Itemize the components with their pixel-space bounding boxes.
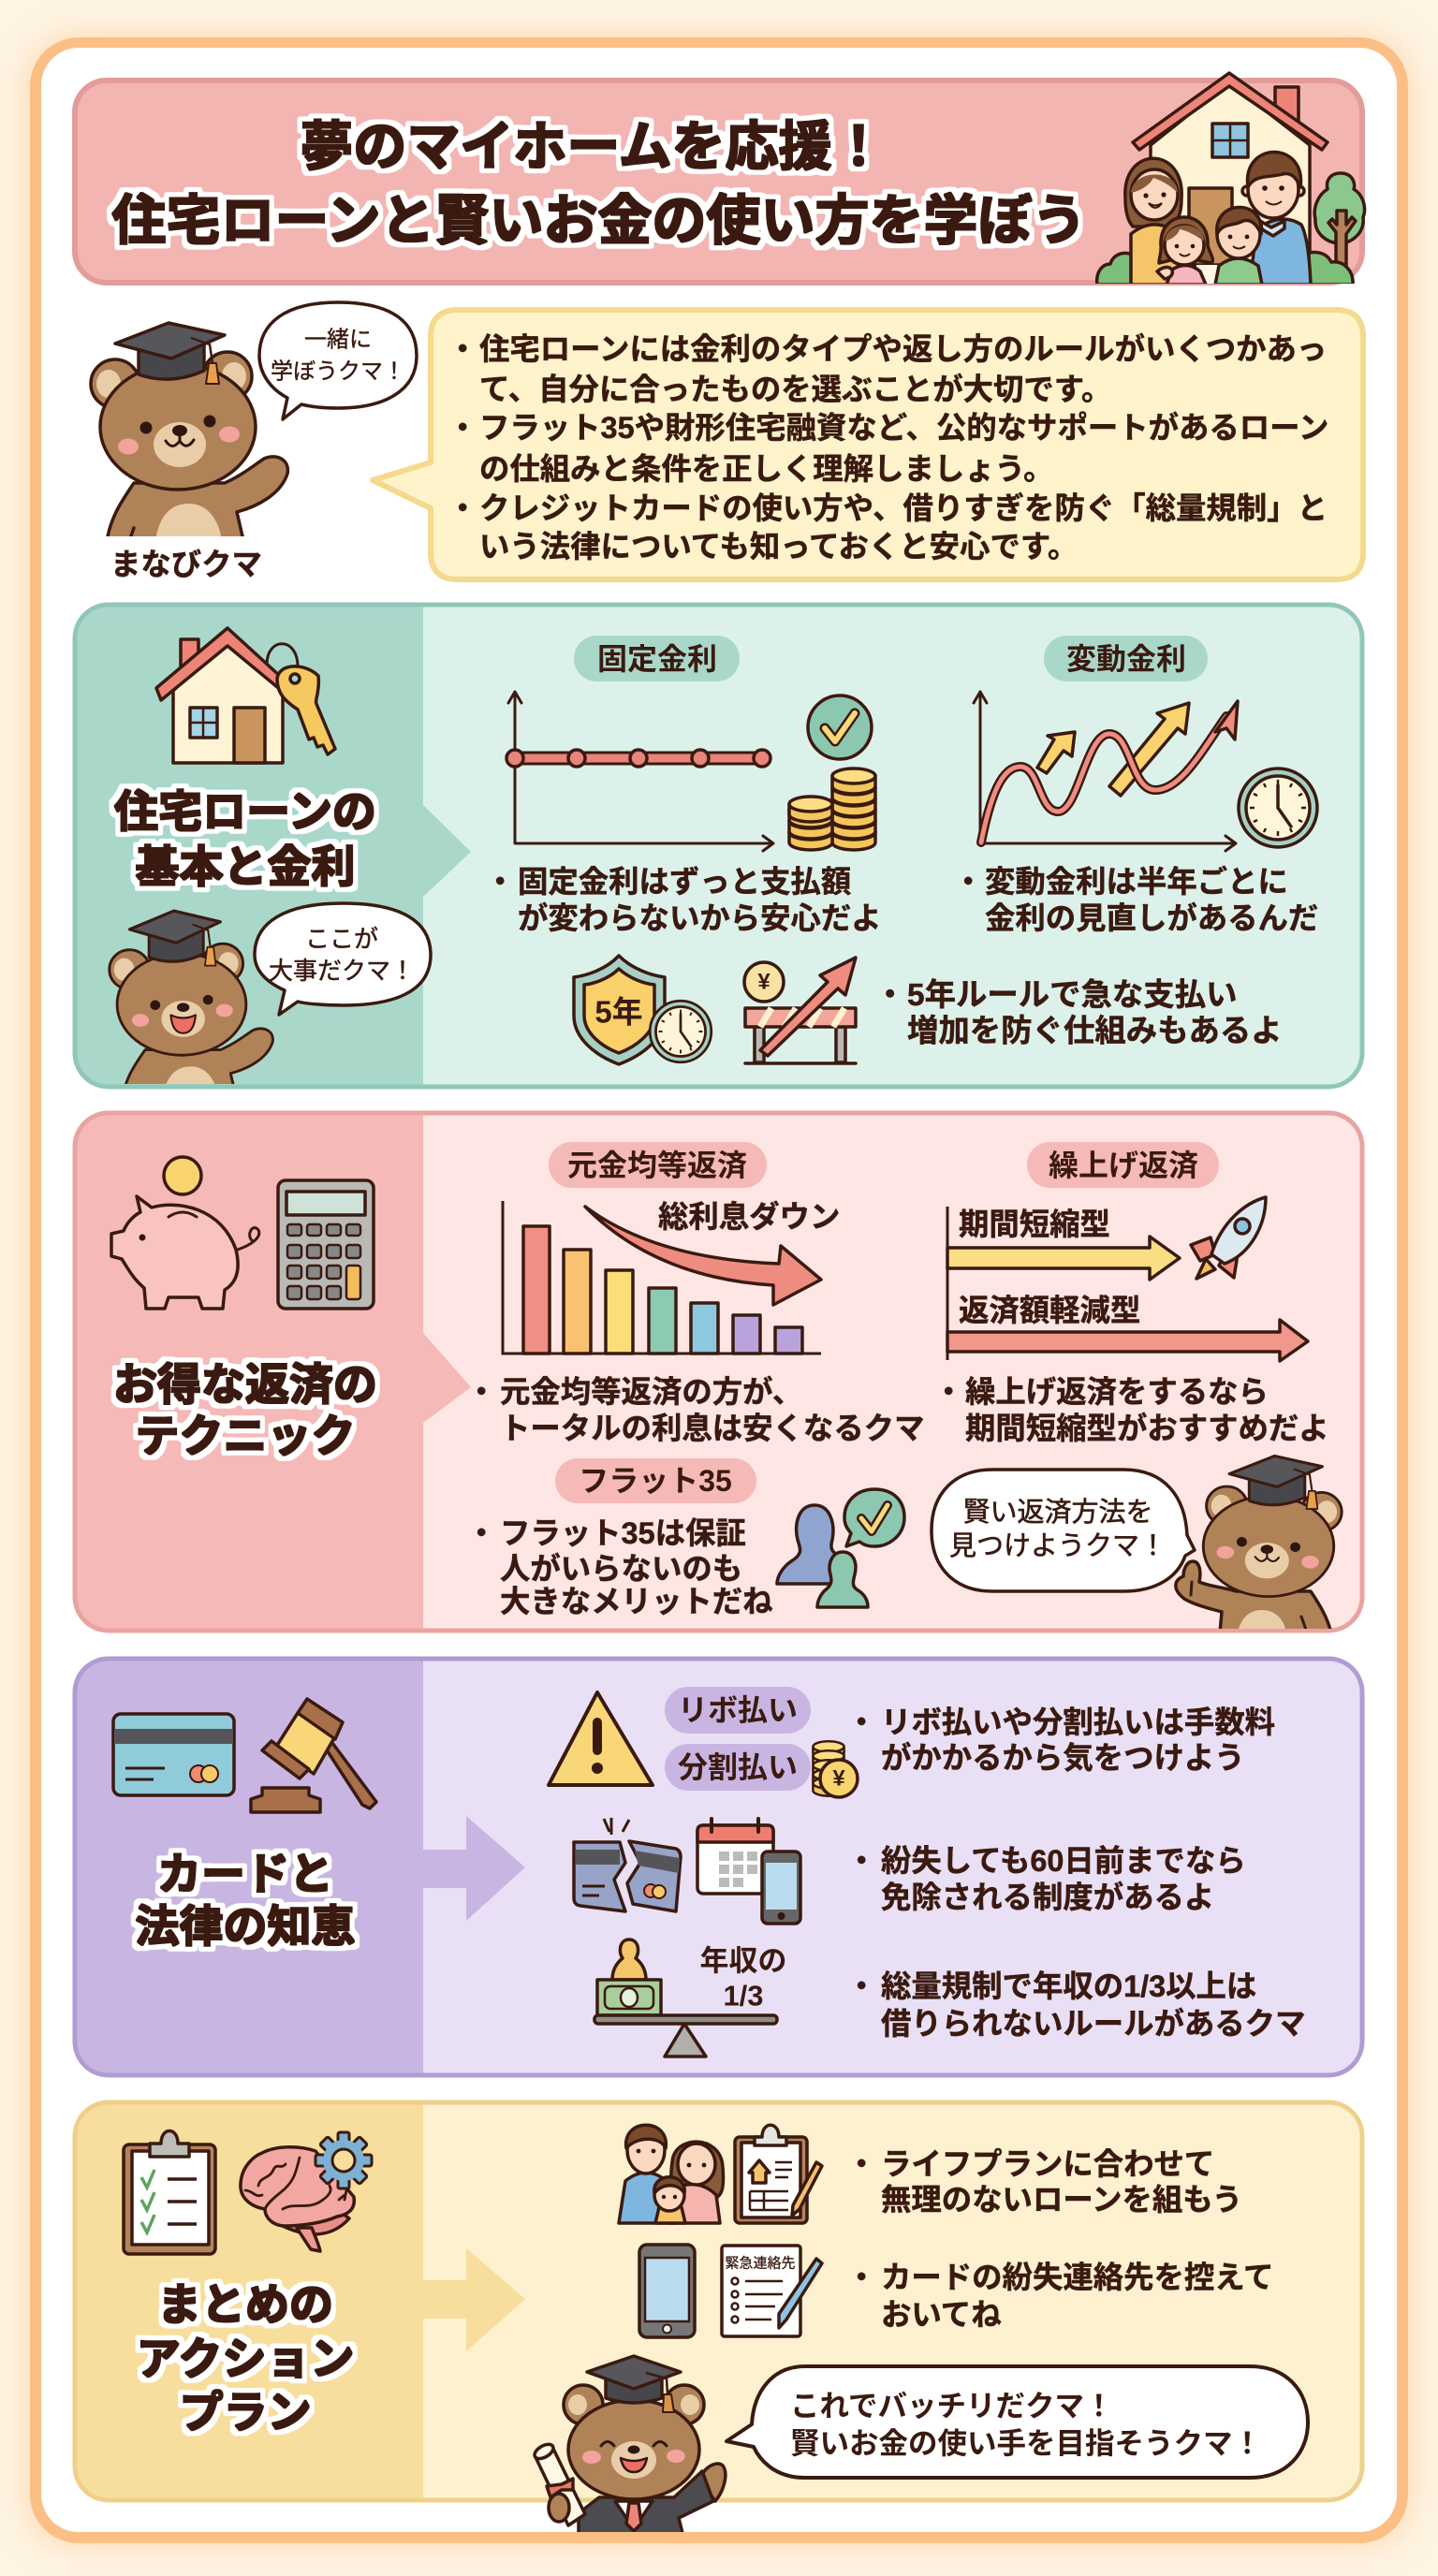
diagram: prepayment types: 返済額軽減型: [959, 1294, 1140, 1327]
flat 35 text: [466, 1516, 773, 1618]
label: revolving payment: [665, 1687, 811, 1734]
diagram: prepayment types: 期間短縮型: [959, 1208, 1110, 1241]
flat 35 text: ・: [466, 1516, 496, 1550]
intro text: の仕組みと条件を正しく理解しましょう。: [479, 452, 1053, 486]
fees text: [846, 1705, 1275, 1775]
label: prepayment: 繰上げ返済: [1049, 1149, 1198, 1182]
icon: brain with gear: [241, 2132, 372, 2251]
mascot: graduate bear with diploma: [532, 2356, 726, 2537]
prepayment text: ・: [933, 1375, 963, 1409]
fixed rate text: 固定金利はずっと支払額: [518, 865, 851, 899]
girl: [1159, 217, 1212, 263]
icon: plan clipboard: [735, 2125, 822, 2223]
intro text: ・: [448, 491, 477, 525]
icon: calendar and phone: [697, 1819, 800, 1924]
lost card contact text: カードの紛失連絡先を控えて: [881, 2261, 1273, 2294]
chart: declining bars: [503, 1199, 840, 1354]
intro text: 住宅ローンには金利のタイプや返し方のルールがいくつかあっ: [479, 331, 1327, 366]
heading: action plan: プラン: [180, 2387, 311, 2437]
label: revolving payment: リボ払い: [678, 1693, 798, 1727]
ribbon: [547, 2479, 573, 2497]
heading: action plan: まとめの: [157, 2280, 333, 2329]
total regulation text: 総量規制で年収の1/3以上は: [881, 1969, 1256, 2003]
mascot: bear thumbs up: [1176, 1456, 1342, 1633]
speech bubble: study together: 学ぼうクマ！: [271, 359, 405, 384]
icon: barrier with rising arrow: [744, 958, 856, 1063]
label: equal principal: 元金均等返済: [567, 1149, 747, 1182]
label: variable rate: [1044, 636, 1208, 681]
heading: cards and law: 法律の知恵: [135, 1902, 356, 1951]
icon: family: [619, 2125, 724, 2223]
panel: loan basics: [75, 605, 1362, 1103]
fees text: ・: [846, 1705, 876, 1739]
heading: cards and law: [135, 1850, 356, 1951]
label: installment payment: [665, 1744, 811, 1791]
arrow: to action items: [421, 2248, 525, 2351]
icon: coin stacks: [789, 768, 875, 850]
prepayment text: 繰上げ返済をするなら: [965, 1375, 1269, 1409]
icon: balance scale: [594, 1939, 786, 2056]
total regulation text: [846, 1969, 1305, 2041]
prepayment text: 期間短縮型がおすすめだよ: [965, 1411, 1329, 1445]
graduation cap: [587, 2356, 681, 2412]
speech bubble: closing message: 賢いお金の使い手を目指そうクマ！: [790, 2426, 1262, 2460]
heading: loan basics: 基本と金利: [135, 842, 356, 891]
speech bubble: find smart repayment: [932, 1470, 1195, 1591]
chart: variable rate curve: [974, 692, 1238, 851]
chart: declining bars: 総利息ダウン: [658, 1199, 840, 1234]
speech bubble: closing message: [726, 2366, 1308, 2478]
left hand: [549, 2494, 569, 2522]
icon: check mark: [808, 695, 872, 759]
equal principal text: トータルの利息は安くなるクマ: [500, 1412, 924, 1445]
head: [568, 2400, 699, 2499]
lost card contact text: [846, 2261, 1273, 2332]
speech bubble: closing message: これでバッチリだクマ！: [790, 2389, 1114, 2422]
mom: [1125, 158, 1181, 227]
necktie: [626, 2503, 641, 2531]
label: flat 35: フラット35: [579, 1464, 732, 1498]
variable rate text: [953, 865, 1318, 935]
heading: loan basics: 住宅ローンの: [114, 786, 376, 837]
icon: clock: [1239, 768, 1317, 847]
icon: piggy bank: [111, 1157, 259, 1309]
illustration: family and house: [1097, 73, 1365, 285]
ears: [564, 2385, 603, 2424]
icon: rocket: [1191, 1197, 1266, 1279]
panel: repayment techniques: [75, 1113, 1362, 1633]
variable rate text: 変動金利は半年ごとに: [985, 865, 1288, 899]
mascot: bear saying important: [110, 911, 272, 1103]
intro text: ・: [448, 411, 477, 445]
label: prepayment: [1027, 1142, 1219, 1188]
title banner: [75, 80, 1362, 283]
panel: introduction callout: [373, 310, 1363, 579]
heading: cards and law: カードと: [157, 1850, 333, 1898]
heading: action plan: アクション: [137, 2334, 354, 2383]
life plan text: ・: [846, 2147, 876, 2181]
muzzle: [611, 2441, 656, 2479]
equal principal text: 元金均等返済の方が、: [500, 1374, 802, 1409]
label: fixed rate: [574, 636, 740, 681]
intro text: クレジットカードの使い方や、借りすぎを防ぐ「総量規制」と: [479, 491, 1328, 525]
intro text: ・: [448, 332, 477, 366]
arrow: to card details: [423, 1816, 525, 1921]
speech bubble: find smart repayment: 見つけようクマ！: [949, 1531, 1167, 1561]
flat 35 text: 大きなメリットだね: [500, 1585, 773, 1618]
speech bubble: study together: [259, 302, 417, 419]
heading: action plan: [137, 2280, 354, 2437]
bushes: [1097, 253, 1135, 285]
label: flat 35: [555, 1458, 756, 1503]
raised hand: [700, 2464, 726, 2501]
speech bubble: study together: 一緒に: [304, 328, 372, 352]
life plan text: ライフプランに合わせて: [881, 2147, 1214, 2181]
chart: fixed rate line: [506, 692, 773, 851]
fixed rate text: [485, 865, 882, 935]
life plan text: [846, 2147, 1242, 2217]
icon: barrier with rising arrow: ¥: [757, 970, 770, 994]
label: variable rate: 変動金利: [1066, 642, 1186, 676]
speech bubble: this is important: [255, 903, 431, 1015]
flat 35 text: フラット35は保証: [500, 1516, 746, 1550]
fixed rate text: が変わらないから安心だよ: [518, 900, 882, 935]
speech bubble: this is important: 大事だクマ！: [269, 957, 415, 985]
label: fixed rate: 固定金利: [597, 642, 717, 676]
suit body: [579, 2471, 713, 2537]
icon: five-year shield with clock: 5年: [594, 994, 643, 1030]
icon: warning triangle: [549, 1692, 653, 1785]
label: equal principal: [549, 1142, 767, 1188]
equal principal text: ・: [466, 1375, 496, 1409]
lost card text: [846, 1844, 1246, 1914]
icon: two people with check bubble: [777, 1489, 904, 1607]
life plan text: 無理のないローンを組もう: [881, 2183, 1242, 2217]
label: installment payment: 分割払い: [678, 1750, 798, 1784]
title text: 夢のマイホームを応援！: [300, 117, 886, 177]
intro text: フラット35や財形住宅融資など、公的なサポートがあるローン: [479, 410, 1328, 445]
five-year rule text: 増加を防ぐ仕組みもあるよ: [907, 1015, 1283, 1048]
heading: repayment techniques: テクニック: [135, 1412, 356, 1460]
panel: action plan: [75, 2102, 1362, 2500]
intro text: て、自分に合ったものを選ぶことが大切です。: [479, 372, 1111, 406]
diagram: prepayment types: [947, 1207, 1308, 1361]
icon: emergency contact note: 緊急連絡先: [725, 2256, 796, 2271]
total regulation text: ・: [846, 1969, 876, 2003]
lost card text: 免除される制度があるよ: [881, 1880, 1214, 1914]
speech bubble: find smart repayment: 賢い返済方法を: [962, 1497, 1153, 1528]
icon: balance scale: 年収の: [700, 1945, 786, 1977]
shirt: [615, 2501, 653, 2529]
icon: broken card: [574, 1818, 681, 1911]
lost card text: 紛失しても60日前までなら: [881, 1844, 1246, 1878]
panel: cards and law: [75, 1659, 1362, 2075]
heading: repayment techniques: お得な返済の: [113, 1359, 377, 1410]
fees text: がかかるから気をつけよう: [881, 1740, 1245, 1775]
five-year rule text: [874, 977, 1283, 1048]
dad: [1250, 219, 1311, 285]
mascot: manabi bear: [91, 323, 287, 549]
heading: repayment techniques: [113, 1359, 377, 1460]
heading: loan basics: [114, 786, 376, 891]
icon: checklist clipboard: [124, 2130, 215, 2254]
five-year rule text: ・: [874, 977, 905, 1013]
icon: house with key: [156, 628, 335, 763]
icon: gavel: [251, 1699, 376, 1812]
fixed rate text: ・: [485, 865, 515, 899]
icon: five-year shield with clock: [574, 956, 712, 1064]
title text: [111, 117, 1087, 251]
total regulation text: 借りられないルールがあるクマ: [881, 2006, 1305, 2041]
mascot name: まなびクマ: [110, 548, 262, 581]
fees text: リボ払いや分割払いは手数料: [881, 1705, 1275, 1739]
icon: balance scale: 1/3: [723, 1979, 764, 2012]
tree: [1314, 173, 1365, 243]
speech bubble: this is important: ここが: [305, 925, 378, 953]
icon: calculator: [278, 1180, 374, 1309]
lost card text: ・: [846, 1844, 876, 1878]
title text: 住宅ローンと賢いお金の使い方を学ぼう: [111, 191, 1087, 251]
flat 35 text: 人がいらないのも: [500, 1551, 742, 1586]
icon: coins with yen: [813, 1741, 858, 1797]
icon: coins with yen: ¥: [832, 1765, 845, 1792]
diploma: [536, 2447, 585, 2525]
prepayment text: [933, 1375, 1329, 1445]
icon: emergency contact note: [722, 2246, 822, 2336]
variable rate text: 金利の見直しがあるんだ: [985, 900, 1318, 935]
lost card contact text: おいてね: [881, 2298, 1002, 2332]
lost card contact text: ・: [846, 2261, 876, 2294]
equal principal text: [466, 1374, 924, 1445]
icon: smartphone: [639, 2245, 695, 2337]
five-year rule text: 5年ルールで急な支払い: [907, 977, 1237, 1013]
intro text: [448, 331, 1328, 564]
icon: credit card: [113, 1714, 234, 1795]
intro text: いう法律についても知っておくと安心です。: [479, 530, 1078, 564]
face features: [582, 2441, 685, 2472]
variable rate text: ・: [953, 865, 983, 899]
boy: [1215, 258, 1262, 285]
